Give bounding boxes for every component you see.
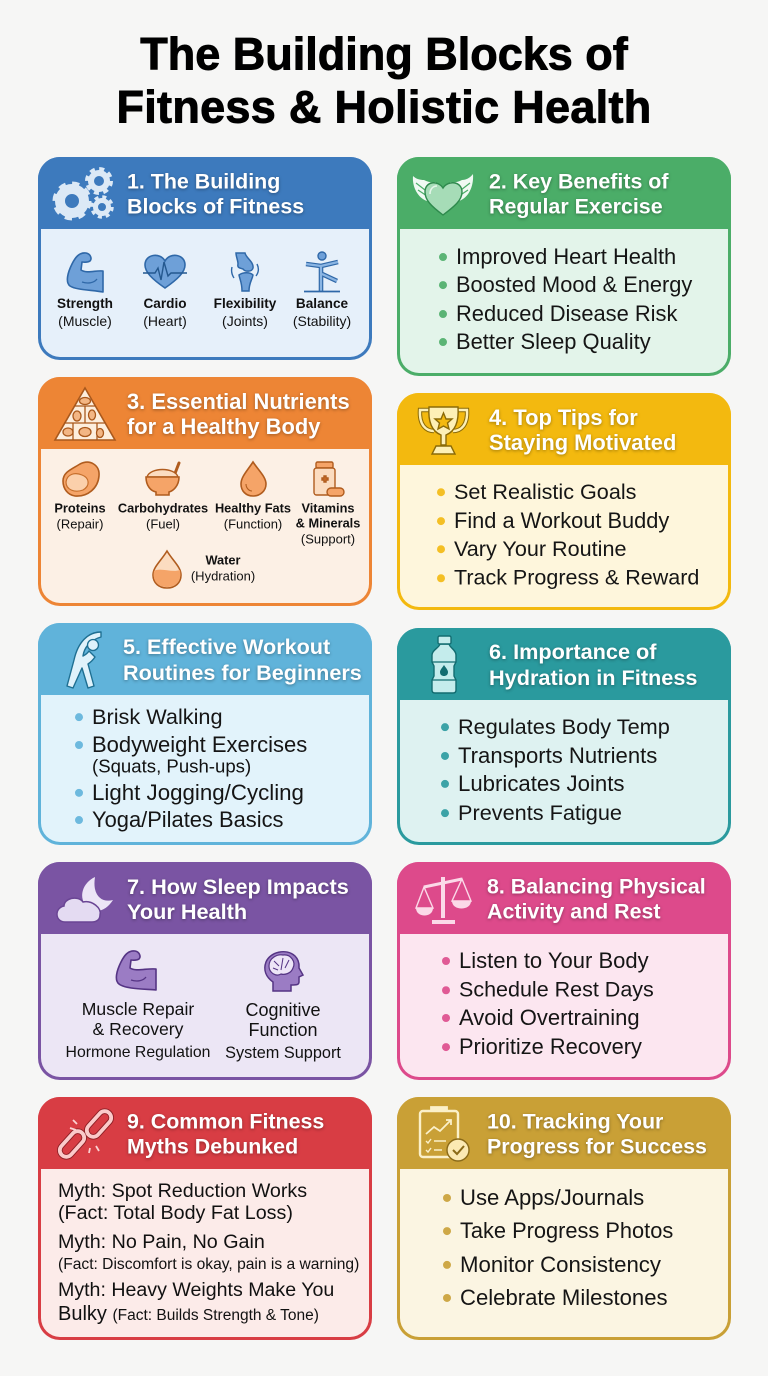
panel: 1 building blocks — [38, 157, 372, 360]
text: flexibility: Flexibility — [214, 296, 276, 311]
icon: muscle — [116, 950, 157, 991]
title: Fitness & Holistic Health — [116, 82, 652, 132]
icon: gears — [52, 167, 114, 220]
text: water — [191, 553, 255, 584]
panel: 10 tracking progress — [397, 1097, 731, 1340]
heading: 5. Effective Workout — [123, 634, 330, 659]
myths text: Myth: Spot Reduction Works — [58, 1180, 307, 1202]
text: cognitive: System Support — [225, 1044, 341, 1062]
icon: food pyramid — [54, 386, 116, 441]
icon: water bottle — [431, 635, 457, 694]
text: vitamins: & Minerals — [296, 516, 360, 531]
list — [438, 244, 692, 354]
text: cardio — [143, 296, 187, 329]
panel: 2 key benefits — [397, 157, 731, 376]
myths text: (Fact: Total Body Fat Loss) — [58, 1202, 293, 1224]
text: proteins: Proteins — [54, 501, 106, 516]
icon: winged heart — [412, 174, 474, 216]
heading — [488, 639, 698, 692]
list: Celebrate Milestones — [460, 1285, 668, 1310]
heading: 10. Tracking Your — [487, 1109, 663, 1133]
panel: 9 myths — [38, 1097, 372, 1340]
heading — [487, 1109, 717, 1159]
icon: water drop — [152, 550, 182, 589]
icon: clipboard — [417, 1104, 471, 1162]
icon: heart — [143, 254, 187, 289]
heading: Activity and Rest — [487, 899, 661, 923]
heading: for a Healthy Body — [127, 414, 320, 439]
list: Monitor Consistency — [460, 1252, 661, 1277]
list — [438, 947, 698, 1059]
list — [440, 714, 670, 825]
list: Vary Your Routine — [454, 536, 626, 561]
heading: 4. Top Tips for — [489, 405, 638, 430]
list: Lubricates Joints — [458, 771, 624, 796]
myths text: Myth: No Pain, No Gain — [58, 1231, 265, 1253]
icon: scales — [415, 872, 473, 926]
icon: balance — [304, 251, 340, 292]
panel: 6 hydration — [397, 628, 731, 845]
text: balance: Balance — [296, 296, 348, 311]
list — [439, 1182, 699, 1312]
text: muscle repair: Hormone Regulation — [66, 1044, 210, 1061]
list: Find a Workout Buddy — [454, 508, 669, 533]
text: water: (Hydration) — [191, 568, 255, 584]
heading — [126, 389, 350, 442]
icon: moon and cloud — [56, 877, 113, 922]
myths text: Myth: Heavy Weights Make You — [58, 1279, 334, 1301]
list: Regulates Body Temp — [458, 714, 670, 739]
list: (Squats, Push-ups) — [92, 756, 251, 777]
list: Improved Heart Health — [456, 244, 676, 269]
text: balance: (Stability) — [293, 313, 351, 329]
text: cognitive: Cognitive — [245, 1000, 321, 1020]
heading: Regular Exercise — [489, 194, 663, 218]
heading: 6. Importance of — [489, 639, 657, 664]
heading — [127, 1109, 342, 1159]
heading: 8. Balancing Physical — [487, 874, 706, 898]
panel: 4 motivation tips — [397, 393, 731, 610]
heading — [487, 874, 712, 924]
text: proteins: (Repair) — [57, 516, 103, 532]
heading — [127, 874, 350, 924]
panel: 3 nutrients — [38, 377, 372, 606]
heading: 2. Key Benefits of — [489, 169, 668, 193]
list: Reduced Disease Risk — [456, 301, 677, 326]
list: Listen to Your Body — [459, 948, 649, 973]
myths text: (Fact: Discomfort is okay, pain is a warning) — [58, 1256, 359, 1273]
text: cognitive — [213, 1000, 353, 1064]
text: healthy fats: (Function) — [224, 516, 282, 532]
list: Transports Nutrients — [458, 743, 657, 768]
list: Prioritize Recovery — [459, 1034, 642, 1059]
list: Use Apps/Journals — [460, 1185, 644, 1210]
heading: 3. Essential Nutrients — [127, 389, 350, 414]
panel: 7 sleep — [38, 862, 372, 1080]
list: Yoga/Pilates Basics — [92, 807, 283, 832]
text: muscle repair — [66, 999, 210, 1061]
list: Boosted Mood & Energy — [456, 272, 692, 297]
list — [74, 704, 307, 832]
heading: Staying Motivated — [489, 430, 676, 455]
list: Schedule Rest Days — [459, 977, 654, 1001]
heading: Myths Debunked — [127, 1134, 298, 1158]
text: muscle repair: & Recovery — [93, 1019, 183, 1039]
list: Light Jogging/Cycling — [92, 780, 304, 805]
heading — [488, 405, 677, 458]
text: carbohydrates: Carbohydrates — [118, 501, 208, 516]
icon: muscle — [66, 252, 104, 293]
list: Prevents Fatigue — [458, 800, 622, 825]
text: carbohydrates — [118, 501, 208, 532]
text: cognitive: Function — [248, 1020, 318, 1040]
text: proteins — [54, 501, 106, 532]
myths text — [58, 1181, 363, 1326]
heading — [488, 169, 670, 220]
myths text: Bulky (Fact: Builds Strength & Tone) — [58, 1303, 319, 1325]
text: healthy fats: Healthy Fats — [215, 501, 291, 516]
heading: 7. How Sleep Impacts — [127, 874, 349, 899]
icon: stretching figure — [66, 631, 102, 689]
heading: 9. Common Fitness — [127, 1109, 324, 1133]
text: strength: Strength — [57, 296, 113, 311]
list — [436, 479, 699, 589]
icon: bowl — [145, 462, 180, 496]
panel: 5 workout routines — [38, 623, 372, 845]
heading — [122, 634, 362, 688]
text: balance — [293, 296, 351, 329]
panel: 8 balance and rest — [397, 862, 731, 1080]
title — [116, 28, 652, 132]
icon: supplement bottle — [313, 461, 345, 497]
text: vitamins — [296, 501, 360, 546]
list: Track Progress & Reward — [454, 565, 699, 589]
list: Better Sleep Quality — [456, 329, 651, 354]
heading: Hydration in Fitness — [489, 665, 697, 690]
text: muscle repair: Muscle Repair — [82, 999, 194, 1019]
text: healthy fats — [215, 501, 291, 532]
list: Brisk Walking — [92, 704, 223, 729]
text: flexibility: (Joints) — [222, 313, 268, 329]
title: The Building Blocks of — [140, 28, 628, 80]
text: cardio: (Heart) — [143, 313, 187, 329]
icon: fat drop — [240, 460, 267, 497]
list: Set Realistic Goals — [454, 479, 636, 504]
text: strength: (Muscle) — [58, 313, 112, 329]
list: Take Progress Photos — [460, 1218, 673, 1243]
list: Avoid Overtraining — [459, 1005, 640, 1030]
heading: Progress for Success — [487, 1134, 707, 1158]
heading: 1. The Building — [127, 169, 280, 193]
text: water: Water — [205, 553, 241, 568]
list: Bodyweight Exercises — [92, 732, 307, 757]
text: cardio: Cardio — [143, 296, 187, 311]
heading: Routines for Beginners — [123, 660, 362, 685]
heading — [126, 169, 305, 218]
heading: Your Health — [127, 899, 247, 924]
icon: broken chain — [56, 1106, 116, 1162]
text: carbohydrates: (Fuel) — [146, 516, 180, 532]
icon: brain head — [264, 951, 304, 992]
icon: joint — [230, 252, 260, 292]
text: strength — [57, 296, 113, 329]
heading: Blocks of Fitness — [127, 194, 304, 218]
text: flexibility — [214, 296, 276, 329]
icon: steak — [62, 461, 100, 497]
icon: trophy — [418, 406, 470, 455]
text: vitamins: Vitamins — [301, 501, 355, 516]
text: vitamins: (Support) — [301, 532, 355, 546]
